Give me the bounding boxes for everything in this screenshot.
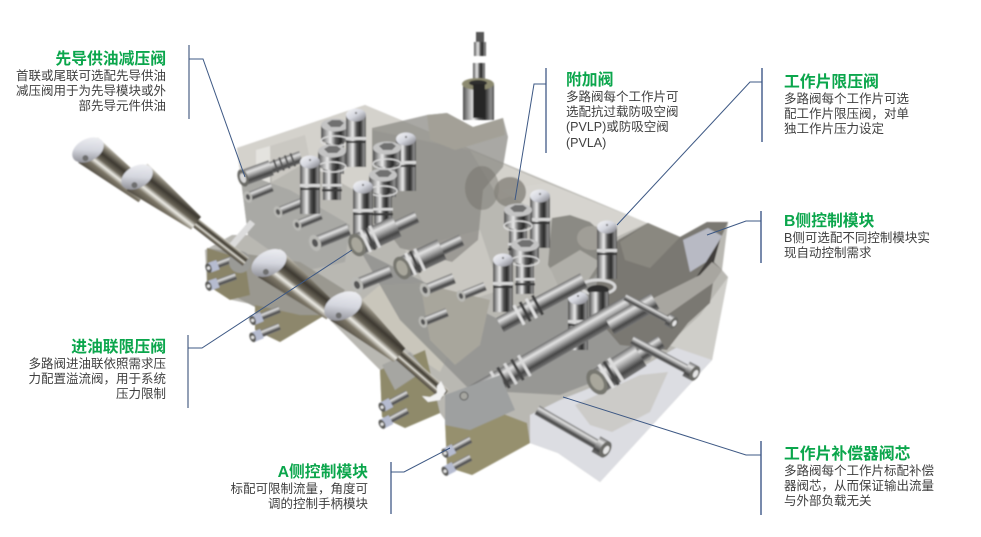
callout: additional valve: (PVLA) xyxy=(566,136,606,150)
callout: additional valve xyxy=(566,71,679,150)
callout: pilot supply reducing valve: 部先导元件供油 xyxy=(78,99,166,113)
top adjustment stem xyxy=(462,32,494,120)
leader line: additional valve xyxy=(515,68,546,200)
callout: inlet section relief valve: 进油联限压阀 xyxy=(71,339,166,356)
callout: A side control module: A侧控制模块 xyxy=(278,464,368,481)
callout: pilot supply reducing valve: 减压阀用于为先导模块或外 xyxy=(16,84,166,98)
callout: inlet section relief valve xyxy=(28,338,166,401)
leader line: work section relief valve xyxy=(617,68,762,225)
lower housing details xyxy=(207,248,728,482)
callout: B side control module xyxy=(784,212,930,260)
callout: work section compensator spool: 器阀芯，从而保证输出流量 xyxy=(784,479,934,493)
callout: inlet section relief valve: 压力限制 xyxy=(116,387,166,401)
callout: work section relief valve: 工作片限压阀 xyxy=(784,74,879,91)
callout: work section relief valve xyxy=(784,73,909,136)
callout: work section compensator spool: 与外部负载无关 xyxy=(784,494,872,508)
control lever 4 xyxy=(313,275,468,412)
callout: A side control module: 调的控制手柄模块 xyxy=(268,497,368,511)
right control module B xyxy=(590,222,728,350)
control lever 2 xyxy=(112,151,258,278)
callout: A side control module xyxy=(230,463,368,511)
service manifold at right centre xyxy=(548,215,614,290)
control lever 3 xyxy=(241,234,346,330)
callout: work section relief valve: 独工作片压力设定 xyxy=(784,122,884,136)
leader line: A side control module xyxy=(391,448,450,514)
callout: inlet section relief valve: 多路阀进油联依照需求压 xyxy=(28,357,166,371)
handle adjustment nuts xyxy=(204,253,473,477)
pilot reducing valve xyxy=(235,148,304,188)
callout: pilot supply reducing valve xyxy=(16,50,166,113)
long tie bolts with nuts xyxy=(532,291,703,460)
callout: A side control module: 标配可限制流量，角度可 xyxy=(230,482,368,496)
work-section valve cartridges xyxy=(300,108,617,350)
callout: work section compensator spool xyxy=(784,445,934,508)
callout: B side control module: B侧可选配不同控制模块实 xyxy=(784,231,930,245)
callout: additional valve: (PVLP)或防吸空阀 xyxy=(566,120,669,134)
leader line: pilot reducing valve xyxy=(189,45,245,177)
callout: additional valve: 多路阀每个工作片可 xyxy=(566,90,679,104)
callout: B side control module: B侧控制模块 xyxy=(784,213,874,230)
transverse spools, upper row xyxy=(307,206,467,298)
leader line: inlet relief valve xyxy=(188,250,352,408)
callout: pilot supply reducing valve: 先导供油减压阀 xyxy=(55,51,166,68)
callout: work section compensator spool: 工作片补偿器阀芯 xyxy=(784,446,910,463)
callout: work section relief valve: 配工作片限压阀，对单 xyxy=(784,107,909,121)
side bolts on left xyxy=(242,182,487,329)
callout: inlet section relief valve: 力配置溢流阀，用于系统 xyxy=(28,372,166,386)
callout: additional valve: 选配抗过载防吸空阀 xyxy=(566,105,679,119)
callout: work section relief valve: 多路阀每个工作片可选 xyxy=(784,92,909,106)
main spool assemblies xyxy=(459,271,669,410)
callout: pilot supply reducing valve: 首联或尾联可选配先导供油 xyxy=(16,69,166,83)
callout: B side control module: 现自动控制需求 xyxy=(784,246,872,260)
leader line: compensator spool xyxy=(563,397,761,515)
translucent valve housing xyxy=(205,105,728,482)
callout: additional valve: 附加阀 xyxy=(566,72,613,89)
leader line: B side control module xyxy=(707,211,761,263)
control lever 1 xyxy=(63,124,157,210)
A-side end plates xyxy=(207,248,530,475)
thin rod behind levers xyxy=(224,220,255,273)
callout: work section compensator spool: 多路阀每个工作片标配补偿 xyxy=(784,464,934,478)
upper control block xyxy=(372,113,526,262)
